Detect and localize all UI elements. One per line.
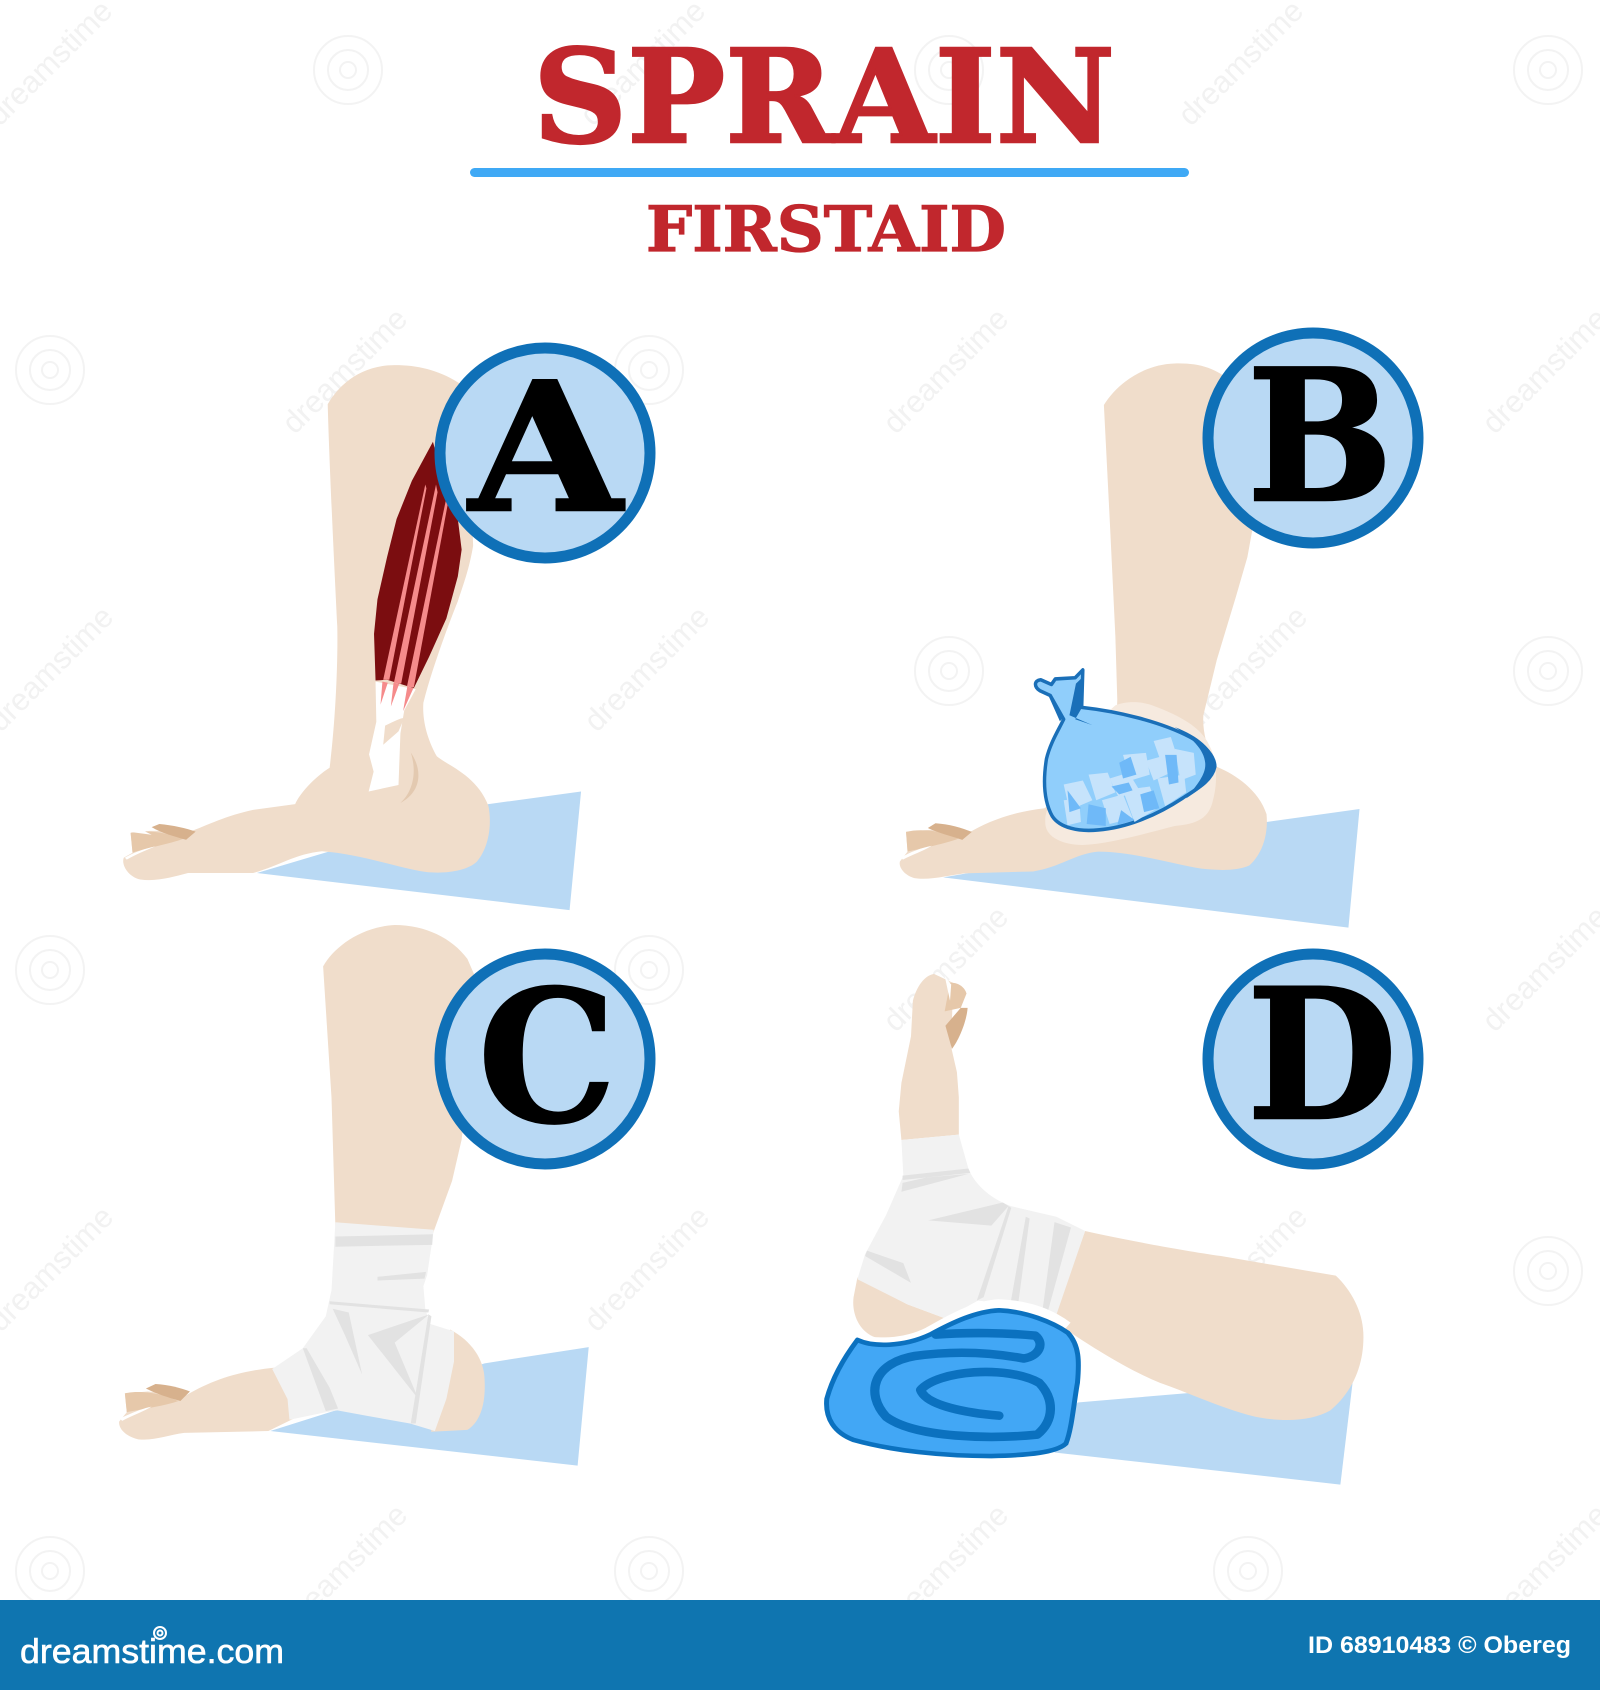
panel B: ice pack xyxy=(900,329,1418,928)
torn ligament skin fibres xyxy=(383,718,404,745)
blue wedge support A xyxy=(257,791,581,910)
text: dreamstime xyxy=(577,599,716,738)
badge D xyxy=(1208,950,1418,1164)
panel D: elevation on cold pack xyxy=(827,950,1418,1485)
text: dreamstime xyxy=(275,301,414,440)
raised leg D xyxy=(1053,1231,1363,1420)
toes A xyxy=(125,824,196,860)
calf muscle xyxy=(374,442,462,688)
panel A: torn ligament xyxy=(123,343,650,910)
foot C xyxy=(119,1367,295,1440)
bandage folds xyxy=(303,1234,433,1424)
text: dreamstime xyxy=(1175,599,1314,738)
blue wedge support B xyxy=(943,809,1360,928)
letter D: D xyxy=(1247,950,1397,1161)
badge C xyxy=(440,950,650,1164)
ice cube shadows xyxy=(1068,755,1179,826)
title: SPRAIN: SPRAIN xyxy=(533,22,1115,173)
bandage folds D xyxy=(865,1169,1071,1315)
blue wedge support D xyxy=(1054,1379,1353,1485)
ice bag xyxy=(1035,670,1215,830)
letter C: C xyxy=(478,950,616,1164)
bandage xyxy=(272,1222,454,1431)
footer logo text: dreamstime.com xyxy=(20,1633,284,1671)
letter B: B xyxy=(1247,329,1393,543)
bandage D xyxy=(857,1135,1085,1320)
cold pack gap (white) xyxy=(852,1303,1068,1341)
upper leg C xyxy=(323,925,479,1234)
bag rim highlight xyxy=(1175,727,1215,798)
text: dreamstime xyxy=(577,1199,716,1338)
torn ligament (white) xyxy=(369,682,416,791)
footer logo icon xyxy=(154,1627,166,1639)
subtitle: FIRSTAID: FIRSTAID xyxy=(646,192,1006,266)
toes D xyxy=(945,976,968,1049)
text: dreamstime xyxy=(275,1497,414,1636)
badge A xyxy=(440,343,650,558)
blue wedge support C xyxy=(270,1347,589,1466)
text: dreamstime xyxy=(876,899,1015,1038)
footer banner xyxy=(0,1600,1600,1690)
toes B xyxy=(901,823,972,860)
leg and foot A xyxy=(123,365,490,880)
letter A: A xyxy=(467,343,625,552)
bag knot creases xyxy=(1048,678,1092,725)
text: dreamstime xyxy=(876,1497,1015,1636)
footer image id: ID 68910483 © Obereg xyxy=(1308,1632,1571,1659)
text: dreamstime xyxy=(876,301,1015,440)
title divider line xyxy=(470,168,1189,177)
panel C: compression bandage xyxy=(119,925,650,1466)
ice cubes xyxy=(1064,737,1196,825)
ankle bone crease xyxy=(400,752,418,803)
leg and foot B xyxy=(900,363,1267,879)
muscle fibres xyxy=(381,485,447,711)
cold pack xyxy=(827,1310,1078,1456)
heel C xyxy=(431,1329,485,1432)
text: dreamstime xyxy=(1175,1199,1314,1338)
swelling xyxy=(1045,702,1216,845)
upper foot D xyxy=(899,974,959,1140)
cold pack swirl xyxy=(875,1333,1050,1437)
badge B xyxy=(1208,329,1418,543)
heel D xyxy=(853,1277,972,1342)
toes C xyxy=(120,1384,190,1421)
